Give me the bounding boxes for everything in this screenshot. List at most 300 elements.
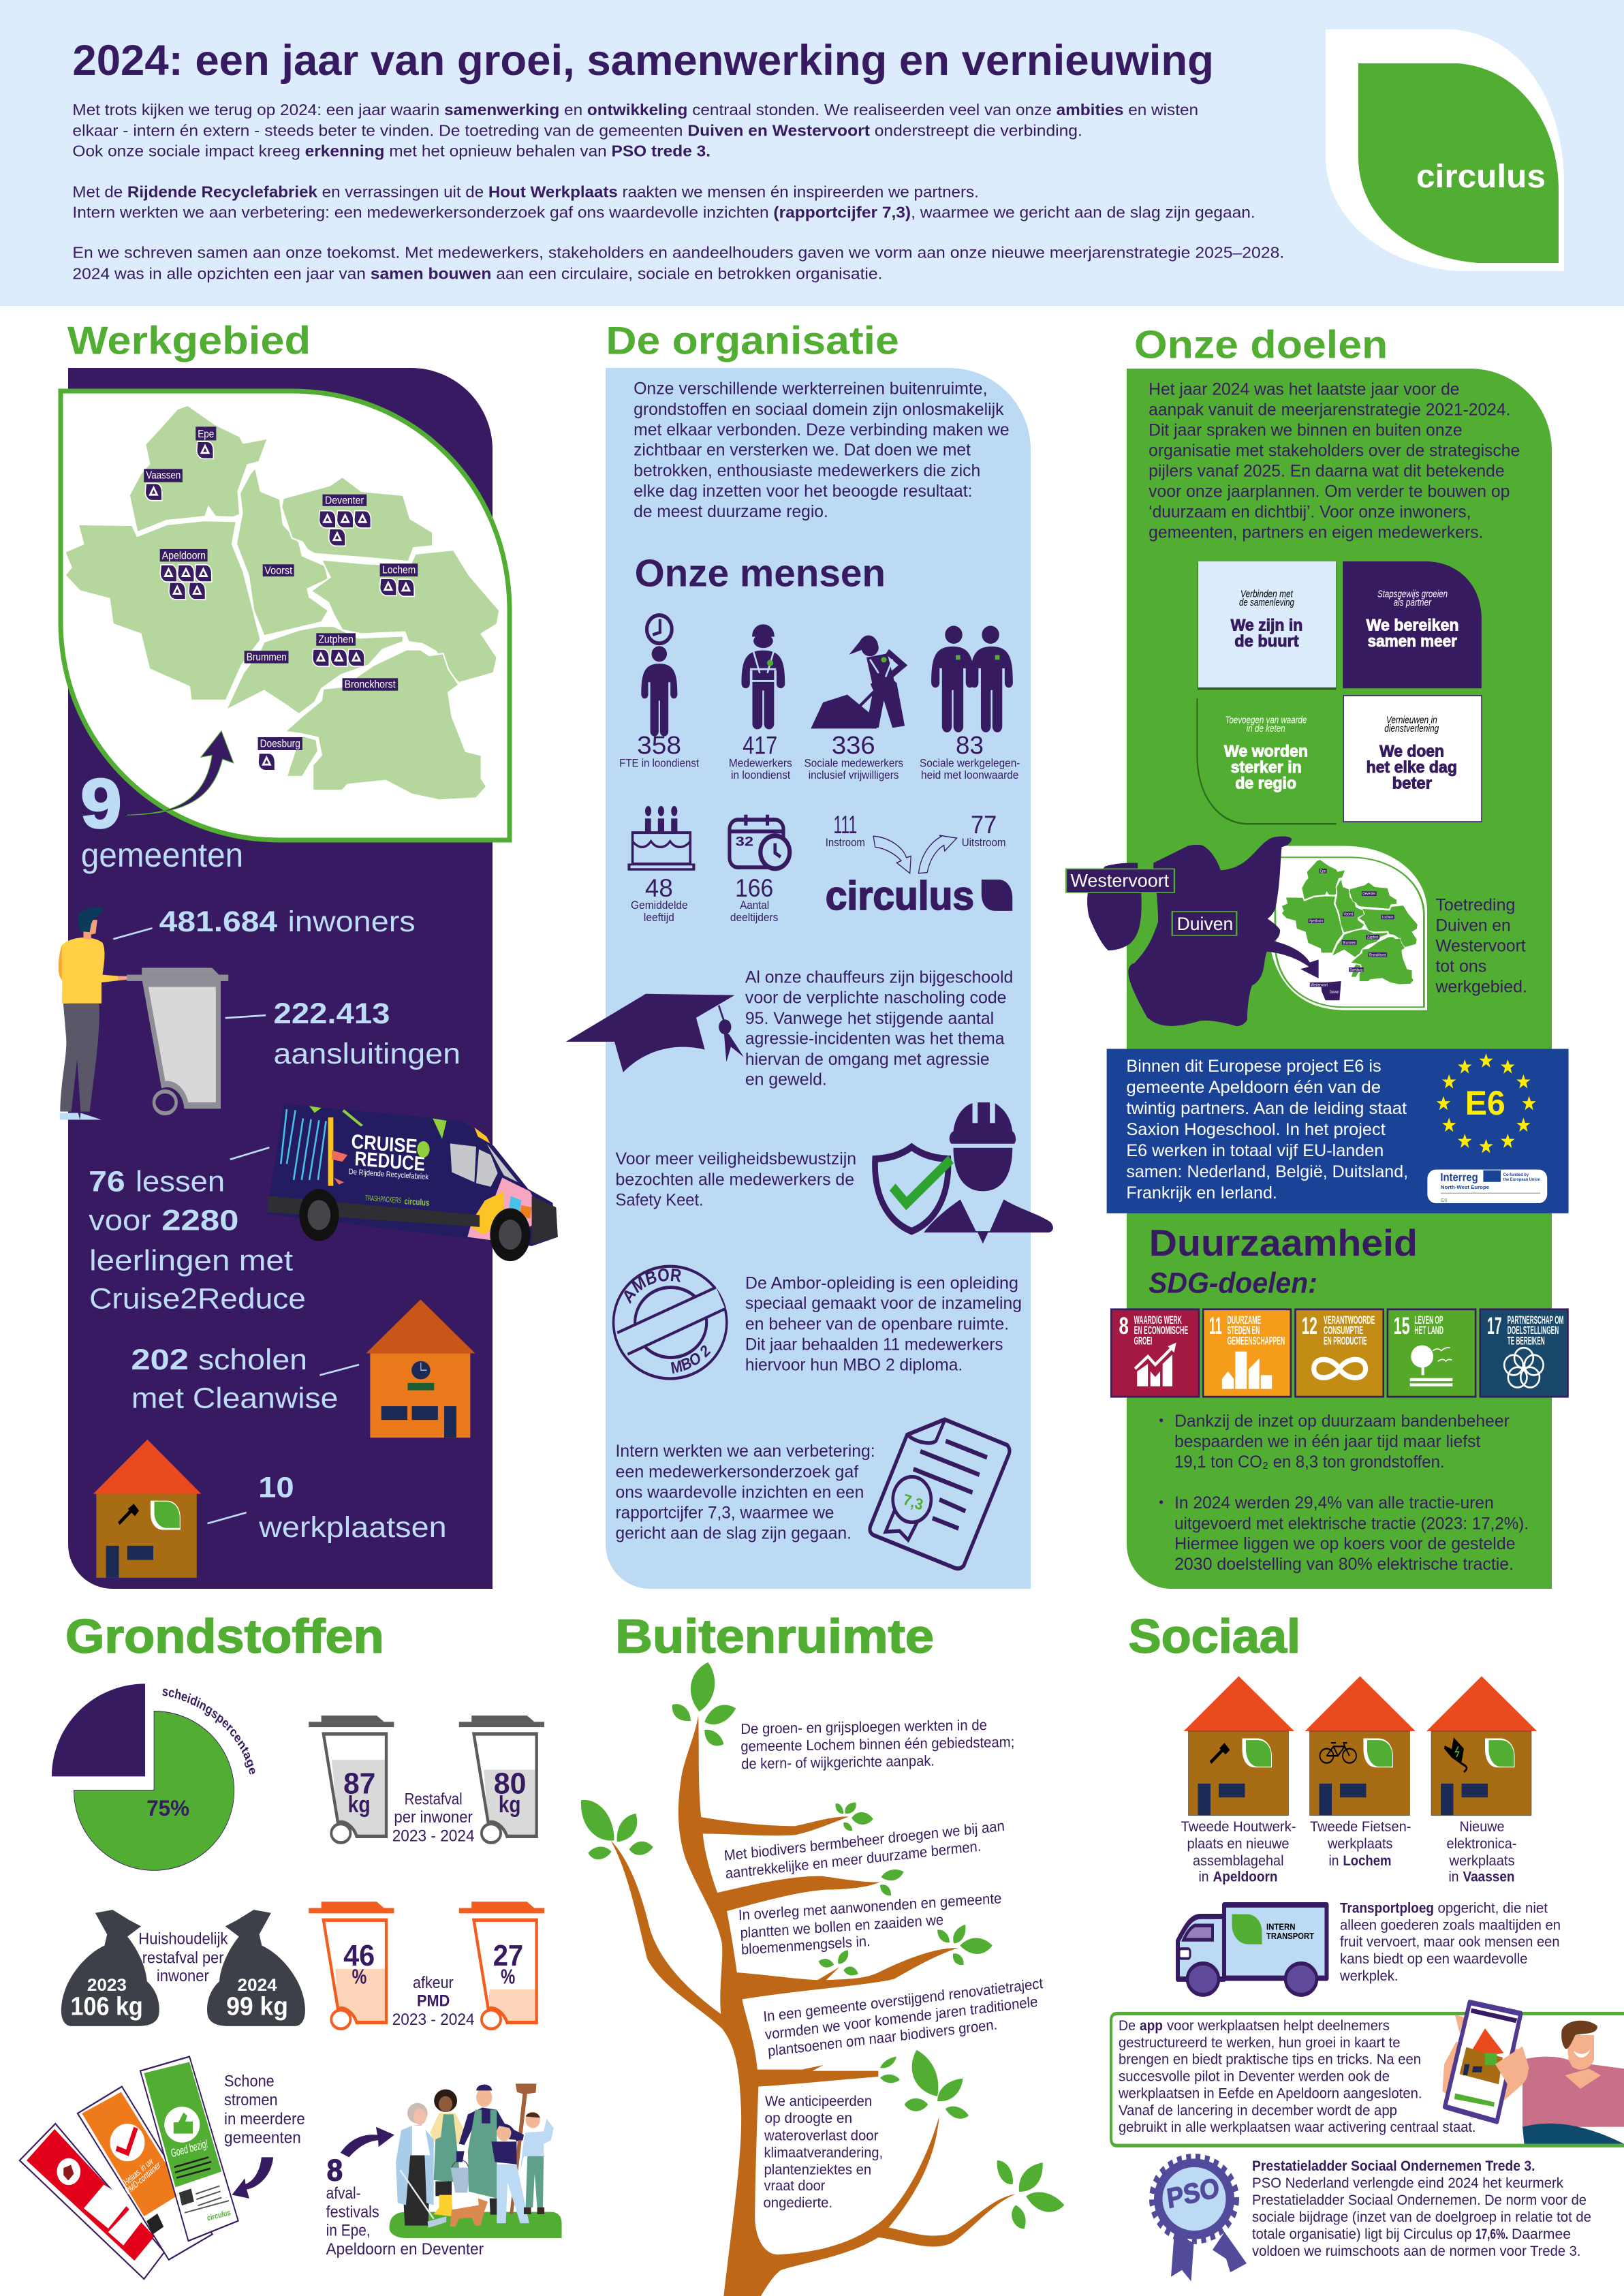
label: Westervoort [1066, 869, 1174, 893]
text: toetreding: Duiven en [1435, 916, 1511, 935]
text: klimaatverandering [764, 2093, 883, 2212]
mini map labels: Westervoort [1311, 982, 1328, 987]
stat: 417 medewerkers: 417 [743, 732, 777, 760]
SDG 15 tile [1388, 1309, 1475, 1397]
text: transportploeg: opgericht, die niet [1438, 1901, 1548, 1917]
arrow: to mini map [1253, 940, 1319, 978]
text: afkeur PMD: afkeur [413, 1973, 454, 1992]
text: E6 project: Frankrijk en Ierland. [1126, 1183, 1277, 1203]
icons: garbage bags: 2024 [238, 1975, 277, 1994]
mini map labels: Apeldoorn [1309, 918, 1323, 923]
stat: 358 FTE: 358 [637, 732, 681, 760]
tile: We bereiken samen meer: We bereiken [1367, 615, 1459, 634]
stat: 417 medewerkers: Medewerkers [729, 758, 792, 770]
caption: Lochem: in [1328, 1853, 1339, 1870]
panel: organisatie background [606, 368, 1031, 1589]
bullet: elektrische tractie: 2030 doelstelling van 80% elektrische tractie. [1174, 1555, 1514, 1574]
logo: Interreg [1427, 1170, 1547, 1203]
stat: lessen Cruise2Reduce [89, 1147, 306, 1316]
text: schone stromen: gemeenten [224, 2128, 301, 2147]
SDG 17 tile: 17 [1487, 1313, 1502, 1339]
arrow: to leaflets [232, 2157, 273, 2199]
SDG 11 tile: STEDEN EN [1228, 1325, 1260, 1337]
leaflet: red [20, 2124, 164, 2279]
caption: Lochem: Tweede Fietsen- [1310, 1819, 1411, 1835]
stat: 83 sociale werkgelegenheid: Sociale werkgelegen- [920, 758, 1020, 770]
tile: We worden sterker in de regio: in de keten [1247, 723, 1285, 734]
text: restafval per inwoner: per inwoner [394, 1808, 473, 1826]
text: PSO: Daarmee [1512, 2227, 1571, 2243]
tile: We doen het elke dag beter: beter [1392, 774, 1433, 792]
bullet: elektrische tractie: uitgevoerd met elektrische tractie (2023: 17,2%). [1174, 1515, 1529, 1534]
text: huishoudelijk restafval: inwoner [157, 1966, 209, 1985]
organisatie top group [619, 379, 1020, 924]
icon: fietsenwerkplaats house [1305, 1676, 1416, 1816]
text: medewerkersonderzoek: een medewerkersonderzoek gaf [616, 1462, 859, 1481]
stat: 358 FTE [619, 615, 700, 770]
map labels and icons: Doesburg [260, 739, 300, 750]
caption: Apeldoorn [1181, 1819, 1296, 1885]
text: Ambor: en beheer van de openbare ruimte. [745, 1314, 1009, 1333]
map labels and icons: Voorst [264, 565, 292, 577]
text: afkeur PMD: 2023 - 2024 [392, 2010, 475, 2028]
icons: garbage bags [61, 1910, 305, 2026]
icon: transport truck: INTERN [1266, 1923, 1296, 1932]
panel: E6 [1107, 1049, 1569, 1213]
tile: We worden sterker in de regio [1197, 698, 1337, 824]
text: toetreding: Toetreding [1435, 896, 1515, 914]
tile: We zijn in de buurt: We zijn in [1231, 615, 1302, 634]
map labels and icons: Lochem [382, 565, 416, 576]
text: schone stromen: Schone [224, 2072, 275, 2090]
caption: Apeldoorn: Tweede Houtwerk- [1181, 1819, 1296, 1835]
illustration: tree trunk [611, 1715, 1016, 2296]
bullet: bandenbeheer: 19,1 ton CO₂ en 8,3 ton grondstoffen. [1174, 1453, 1444, 1472]
text: veiligheid: bezochten alle medewerkers de [616, 1170, 854, 1189]
icon: workplace house [93, 1440, 201, 1578]
bin: restafval 2024 [459, 1716, 544, 1843]
text: app: voor werkplaatsen helpt deelnemers [1167, 2018, 1390, 2034]
text: veiligheid [616, 1149, 856, 1209]
pie chart: scheidingspercentage [52, 1684, 255, 1871]
section headings top row [67, 319, 1388, 367]
paragraph: doelen intro: voor onze jaarplannen. Om verder te bouwen op [1149, 482, 1510, 501]
bin: PMD 2023 [309, 1902, 394, 2029]
text: gebiedsteam: De groen- en grijsploegen werkten in de [740, 1717, 987, 1738]
map: Duiven [1128, 836, 1292, 1026]
stat: 417 medewerkers [729, 624, 792, 781]
tile: We doen het elke dag beter: het elke dag [1367, 758, 1457, 776]
caption: Vaassen: elektronica- [1447, 1836, 1517, 1852]
text: gebiedsteam: gemeente Lochem binnen één gebiedsteam; [740, 1734, 1014, 1755]
text: klimaatverandering: vraat door [764, 2177, 826, 2194]
illustration: Cruise2Reduce van: REDUCE [354, 1147, 426, 1175]
stat: instroom uitstroom: 77 [971, 812, 997, 839]
tile: We zijn in de buurt [1198, 561, 1337, 690]
text: transportploeg [1339, 1901, 1561, 1985]
sociaal group [1111, 1611, 1624, 2281]
text: app: gestructureerd te werken, hun groei in kaart te [1119, 2035, 1401, 2051]
text: bollen en zaaiden [738, 1890, 1002, 1958]
bullet: bandenbeheer: bespaarden we in één jaar tijd maar liefst [1174, 1432, 1481, 1451]
text: renovatietraject: In een gemeente overstijgend renovatietraject [763, 1975, 1044, 2026]
stat: lessen Cruise2Reduce: Cruise2Reduce [89, 1284, 306, 1316]
text: gebiedsteam [740, 1717, 1014, 1773]
SDG 15 tile: HET LAND [1414, 1325, 1443, 1337]
stat: 9 gemeenten: 9 [80, 765, 122, 843]
SDG 8 tile: GROEI [1134, 1335, 1152, 1347]
tile: We bereiken samen meer: Stapsgewijs groeien [1377, 588, 1448, 600]
text: veiligheid: Voor meer veiligheidsbewustzijn [616, 1149, 856, 1168]
text: PSO [1252, 2158, 1591, 2260]
caption: Vaassen [1447, 1819, 1516, 1885]
icon: PSO rosette: PSO [1165, 2171, 1221, 2214]
text: app: succesvolle pilot in Deventer werden ook de [1119, 2069, 1390, 2085]
bullet: bandenbeheer: Dankzij de inzet op duurzaam bandenbeheer [1174, 1412, 1510, 1431]
bin: PMD 2023: 46 [343, 1940, 375, 1972]
bin: restafval 2023 [309, 1716, 394, 1843]
text: transportploeg: fruit vervoert, maar ook mensen een [1340, 1934, 1559, 1951]
leaflet: orange: Helaas, in uw [122, 2156, 155, 2188]
caption: Apeldoorn: plaats en nieuwe [1187, 1836, 1289, 1852]
werkgebied stats group [59, 906, 558, 1578]
tile: We zijn in de buurt: Verbinden met [1240, 588, 1294, 600]
mini map labels [1308, 869, 1394, 1000]
pie chart: scheidingspercentage: scheidingspercentage [162, 1688, 255, 1775]
caption: Lochem [1310, 1819, 1411, 1870]
text: PSO: totale organisatie) ligt bij Circulus op [1252, 2227, 1471, 2243]
illustration: Cruise2Reduce van: De Rijdende Recyclefabriek [349, 1168, 429, 1182]
text: app: gebruikt in alle werkplaatsen waar activering centraal staat. [1119, 2120, 1476, 2136]
bin: PMD 2023: % [352, 1965, 366, 1988]
bin: restafval 2024: kg [499, 1791, 520, 1818]
mini map labels: Zutphen [1367, 935, 1378, 940]
bullet: elektrische tractie: Hiermee liggen we op koers voor de gestelde [1174, 1534, 1516, 1553]
stat: 358 FTE: FTE in loondienst [619, 758, 700, 770]
heading: SDG-doelen: SDG-doelen: [1149, 1267, 1317, 1299]
tile: We worden sterker in de regio: sterker in [1231, 758, 1302, 776]
tile: We worden sterker in de regio: Toevoegen van waarde [1225, 714, 1307, 726]
stat: 8 afvalfestivals: 8 [327, 2153, 343, 2187]
text: chauffeurs: agressie-incidenten was het thema [745, 1029, 1005, 1048]
text: huishoudelijk restafval: restafval per [142, 1948, 224, 1967]
map labels and icons [144, 426, 418, 771]
paragraph: doelen intro: Het jaar 2024 was het laatste jaar voor de [1149, 380, 1460, 399]
leaflet: orange: PMD-container [123, 2159, 162, 2197]
mini map labels: Brummen [1343, 940, 1356, 945]
map labels and icons: Epe [198, 429, 214, 440]
text: afkeur PMD: PMD [417, 1991, 450, 2010]
caption: Apeldoorn: in [1199, 1870, 1209, 1885]
illustration: Cruise2Reduce van: circulus [404, 1196, 430, 1208]
bin: PMD 2024: 27 [493, 1940, 523, 1972]
intro paragraphs: Ook onze sociale impact kreeg erkenning met het opnieuw behalen van PSO trede 3. [72, 142, 710, 159]
tile: We worden sterker in de regio: de regio [1235, 774, 1296, 792]
stat: 8 afvalfestivals: afval- [326, 2184, 361, 2202]
stat: 9 gemeenten: gemeenten [81, 837, 243, 875]
icon: E6 stars [1437, 1053, 1536, 1153]
stat: 8 afvalfestivals: festivals [326, 2203, 379, 2221]
stat: 83 sociale werkgelegenheid: 83 [956, 732, 984, 760]
text: renovatietraject: vormden we voor komende jaren traditionele [764, 1994, 1038, 2043]
text: app: werkplaatsen in Eefde en Apeldoorn aangesloten. [1118, 2086, 1422, 2102]
text: medewerkersonderzoek: gericht aan de slag zijn gegaan. [616, 1523, 852, 1542]
text: afkeur PMD [392, 1973, 475, 2028]
text: bermbeheer [723, 1818, 1005, 1882]
heading: Buitenruimte: Buitenruimte [615, 1611, 934, 1663]
mini map labels: Duiven [1330, 989, 1339, 995]
text: bollen en zaaiden: bloemenmengsels in. [741, 1933, 871, 1958]
text: transportploeg: alleen goederen zoals maaltijden en [1340, 1918, 1561, 1934]
text: transportploeg: kans biedt op een waardevolle [1340, 1951, 1527, 1968]
paragraph: organisatie intro: grondstoffen en sociaal domein zijn onlosmakelijk [634, 400, 1004, 419]
panel: app [1111, 2014, 1624, 2145]
leaflet: green [140, 2057, 238, 2241]
stat: aansluitingen: 222.413 [274, 998, 390, 1030]
paragraph: doelen intro [1149, 380, 1520, 542]
organisatie stories group [565, 967, 1053, 1571]
tile: We doen het elke dag beter [1343, 696, 1482, 822]
text: toetreding: tot ons [1435, 957, 1486, 976]
icon: transport truck: TRANSPORT [1266, 1932, 1314, 1941]
bin: restafval 2024: 80 [494, 1767, 526, 1800]
text: PSO: voldoen we ruimschoots aan de normen voor Trede 3. [1252, 2244, 1581, 2260]
text: app: Vanaf de lancering in december wordt de app [1119, 2103, 1397, 2119]
caption: Apeldoorn: assemblagehal [1193, 1853, 1283, 1870]
stat: inwoners: inwoners [287, 906, 416, 938]
tile: We worden sterker in de regio: We worden [1224, 741, 1308, 760]
header band [0, 0, 1624, 306]
stat: 8 afvalfestivals: Apeldoorn en Deventer [326, 2239, 484, 2258]
bullet: elektrische tractie [1159, 1493, 1529, 1574]
text: transportploeg: werkplek. [1339, 1968, 1399, 1985]
icon: E6 stars: E6 [1465, 1085, 1505, 1122]
text: bollen en zaaiden: In overleg met aanwonenden en gemeente [738, 1890, 1002, 1924]
logo: Interreg: Co-funded by [1503, 1173, 1529, 1177]
section headings top row: Werkgebied [67, 319, 311, 362]
paragraph: organisatie intro: de meest duurzame regio. [634, 502, 828, 521]
stat: 336 sociale medewerkers: inclusief vrijwilligers [809, 769, 899, 781]
text: bermbeheer: Met biodivers bermbeheer droegen we bij aan [723, 1818, 1005, 1864]
text: toetreding: werkgebied. [1435, 978, 1527, 996]
map labels and icons: Vaassen [146, 470, 181, 482]
Circulus logo [1326, 29, 1564, 271]
logo: Interreg: the European Union [1503, 1177, 1540, 1182]
icon: transport truck [1178, 1905, 1327, 1995]
paragraph: organisatie intro [634, 379, 1010, 521]
stat: lessen Cruise2Reduce: voor [89, 1205, 151, 1237]
icon: houtwerkplaats house [1184, 1676, 1294, 1816]
stat: scholen Cleanwise [131, 1344, 359, 1415]
text: Ambor: hiervoor hun MBO 2 diploma. [745, 1355, 963, 1374]
leaflet: green: circulus [206, 2208, 232, 2223]
stat: lessen Cruise2Reduce: 2280 [161, 1205, 239, 1237]
text: E6 project: E6 werken in totaal vijf EU-landen [1126, 1141, 1384, 1160]
intro paragraphs [72, 101, 1284, 282]
caption: Vaassen: in [1448, 1870, 1459, 1885]
map: Westervoort [1087, 863, 1142, 950]
illustration: Cruise2Reduce van: TRASHPACKERS [365, 1194, 402, 1205]
heading: Duurzaamheid: Duurzaamheid [1149, 1222, 1418, 1264]
stat: 8 afvalfestivals [326, 2153, 484, 2258]
SDG 15 tile: 15 [1394, 1313, 1410, 1339]
map labels and icons: Zutphen [318, 634, 354, 646]
text: PSO: Prestatieladder Sociaal Ondernemen. De norm voor de [1252, 2192, 1587, 2209]
text: schone stromen: stromen [224, 2090, 278, 2109]
text: PSO: sociale bijdrage (inzet van de doelgroep in relatie tot de [1252, 2209, 1591, 2226]
text: E6 project: twintig partners. Aan de leiding staat [1126, 1099, 1407, 1118]
SDG 17 tile: DOELSTELLINGEN [1508, 1325, 1559, 1337]
stat: scholen Cleanwise: met Cleanwise [131, 1383, 338, 1415]
text: chauffeurs: Al onze chauffeurs zijn bijgeschoold [745, 967, 1013, 987]
buitenruimte group [581, 1611, 1064, 2296]
tile: We doen het elke dag beter: Vernieuwen in [1386, 714, 1437, 726]
stat: 166 deeltijders: Aantal [740, 899, 769, 912]
tile: We bereiken samen meer: als partner [1394, 597, 1432, 608]
label: Duiven: Duiven [1177, 914, 1233, 934]
paragraph: organisatie intro: met elkaar verbonden. Deze verbinding maken we [634, 420, 1010, 439]
bin: PMD 2024: % [501, 1965, 515, 1988]
SDG 15 tile: LEVEN OP [1414, 1315, 1443, 1327]
paragraph: organisatie intro: zichtbaar en versterken we. Dat doen we met [634, 441, 971, 460]
doelen top group [1149, 380, 1520, 824]
map labels and icons: Bronckhorst [345, 679, 396, 691]
tile: We bereiken samen meer: samen meer [1368, 632, 1457, 651]
caption: Lochem: werkplaats [1327, 1836, 1392, 1852]
text: chauffeurs: hiervan de omgang met agressie [745, 1049, 990, 1068]
icon: rapport certificate [870, 1419, 1010, 1568]
text: app: app [1140, 2018, 1163, 2034]
bullet: bandenbeheer [1159, 1412, 1510, 1472]
text: E6 project: samen: Nederland, België, Duitsland, [1126, 1162, 1408, 1181]
icon: Ambor stamp [612, 1265, 728, 1380]
toetreding Duiven en Westervoort group [1066, 836, 1527, 1026]
label: Duiven [1172, 912, 1236, 935]
tile: We doen het elke dag beter: dienstverlening [1384, 723, 1439, 734]
icons: garbage bags: 99 kg [226, 1992, 288, 2021]
tile: We zijn in de buurt: de buurt [1234, 632, 1299, 651]
SDG 8 tile: WAARDIG WERK [1134, 1315, 1182, 1327]
paragraph: organisatie intro: betrokken, enthousiaste medewerkers die zich [634, 461, 980, 481]
grondstoffen group [18, 1609, 545, 2280]
stat: 417 medewerkers: in loondienst [731, 769, 791, 781]
stat: 166 deeltijders [730, 815, 790, 924]
icon: Ambor stamp: MBO 2 [670, 1345, 711, 1374]
stat: 83 sociale werkgelegenheid [920, 625, 1020, 781]
bullet: elektrische tractie: In 2024 werden 29,4% van alle tractie-uren [1174, 1493, 1494, 1512]
stat: werkplaatsen: werkplaatsen [258, 1512, 447, 1544]
arrow from 9 to map [127, 731, 234, 815]
text: toetreding [1435, 896, 1527, 996]
text: app [1118, 2018, 1475, 2136]
text: Ambor [745, 1273, 1022, 1374]
paragraph: doelen intro: aanpak vanuit de meerjarenstrategie 2021-2024. [1149, 401, 1510, 419]
stat: scholen Cleanwise: scholen [198, 1344, 307, 1376]
caption: Vaassen: werkplaats [1448, 1853, 1514, 1870]
paragraph: doelen intro: organisatie met stakeholders over de strategische [1149, 441, 1520, 460]
text: klimaatverandering: ongedierte. [764, 2194, 832, 2212]
mini map [1281, 860, 1418, 984]
mini map labels: Deventer [1362, 891, 1375, 896]
text: chauffeurs: en geweld. [745, 1070, 827, 1089]
icons: garbage bags: 106 kg [71, 1992, 143, 2021]
text: medewerkersonderzoek: Intern werkten we aan verbetering: [616, 1441, 875, 1460]
text: bermbeheer: aantrekkelijke en meer duurzame bermen. [725, 1838, 982, 1882]
circulus wordmark: circulus [826, 873, 974, 918]
text: app: De [1119, 2018, 1136, 2034]
SDG 11 tile: DUURZAME [1228, 1315, 1261, 1327]
SDG 12 tile: VERANTWOORDE [1324, 1315, 1375, 1327]
heading: Onze mensen: Onze mensen [635, 553, 886, 595]
stat: werkplaatsen [208, 1472, 447, 1544]
text: renovatietraject [763, 1975, 1044, 2060]
logo: Interreg: E6 [1441, 1198, 1448, 1203]
text: PSO: PSO Nederland verlengde eind 2024 het keurmerk [1252, 2175, 1563, 2192]
text: klimaatverandering: klimaatverandering, [764, 2144, 883, 2161]
stat: 9 gemeenten [80, 765, 243, 875]
stat: instroom uitstroom: 111 [833, 812, 857, 839]
leaflet: green: Goed bezig! [170, 2137, 209, 2160]
SDG 11 tile: GEMEENSCHAPPEN [1228, 1335, 1285, 1347]
logo: Interreg: North-West Europe [1441, 1184, 1489, 1190]
caption: Vaassen: Nieuwe [1459, 1819, 1504, 1835]
text: E6 project: gemeente Apeldoorn één van de [1126, 1079, 1381, 1097]
paragraph: doelen intro: Dit jaar spraken we binnen en buiten onze [1149, 421, 1463, 439]
text: PSO: 17,6%. [1475, 2227, 1508, 2243]
text: huishoudelijk restafval: Huishoudelijk [138, 1929, 228, 1948]
text: medewerkersonderzoek: rapportcijfer 7,3, waarmee we [616, 1503, 834, 1522]
text: E6 project: Binnen dit Europese project E6 is [1126, 1057, 1381, 1076]
stat: 336 sociale medewerkers [805, 636, 905, 781]
icon: elektronicawerkplaats house [1426, 1676, 1537, 1816]
arrow: to people [341, 2127, 394, 2157]
stat: inwoners: 481.684 [159, 906, 277, 938]
illustration: Cruise2Reduce van: CRUISE [351, 1130, 418, 1158]
stat: 48 gemiddelde leeftijd: leeftijd [644, 912, 674, 924]
stat: lessen Cruise2Reduce: leerlingen met [89, 1245, 294, 1277]
text: gebiedsteam: de kern- of wijkgerichte aanpak. [741, 1753, 935, 1773]
text: chauffeurs [745, 967, 1013, 1089]
stat: 48 gemiddelde leeftijd: Gemiddelde [631, 899, 688, 912]
mini map frame [1268, 846, 1427, 1010]
mini map labels: Voorst [1343, 912, 1354, 916]
paragraph: doelen intro: pijlers vanaf 2025. En daarna wat dit betekende [1149, 462, 1505, 480]
bin: restafval 2023: kg [348, 1791, 371, 1818]
stat: scholen Cleanwise: 202 [131, 1344, 189, 1376]
illustration: person with bin [59, 907, 228, 1120]
bin: PMD 2024 [459, 1902, 544, 2029]
mini map labels: Epe [1320, 869, 1326, 873]
illustration: Cruise2Reduce van [268, 1104, 558, 1261]
SDG 8 tile: EN ECONOMISCHE [1134, 1325, 1188, 1337]
text: E6 project [1126, 1057, 1408, 1203]
text: restafval per inwoner: 2023 - 2024 [392, 1827, 475, 1845]
stat: aansluitingen [225, 998, 460, 1070]
map labels and icons: Apeldoorn [162, 550, 206, 562]
text: medewerkersonderzoek [616, 1441, 875, 1542]
SDG 17 tile: PARTNERSCHAP OM [1508, 1315, 1563, 1327]
text: medewerkersonderzoek: ons waardevolle inzichten en een [616, 1483, 864, 1502]
mini map labels: Lochem [1382, 914, 1393, 920]
stat: instroom uitstroom: Instroom [826, 837, 865, 849]
panel: doelen background [1127, 369, 1552, 1589]
stat: 83 sociale werkgelegenheid: heid met loonwaarde [921, 769, 1019, 781]
text: veiligheid: Safety Keet. [616, 1190, 704, 1209]
icon: Ambor stamp: AMBOR [624, 1269, 681, 1304]
paragraph: doelen intro: ‘duurzaam en dichtbij’. Voor onze inwoners, [1149, 503, 1471, 521]
icons: garbage bags: 2023 [87, 1975, 127, 1994]
text: Ambor: De Ambor-opleiding is een opleiding [745, 1273, 1018, 1292]
